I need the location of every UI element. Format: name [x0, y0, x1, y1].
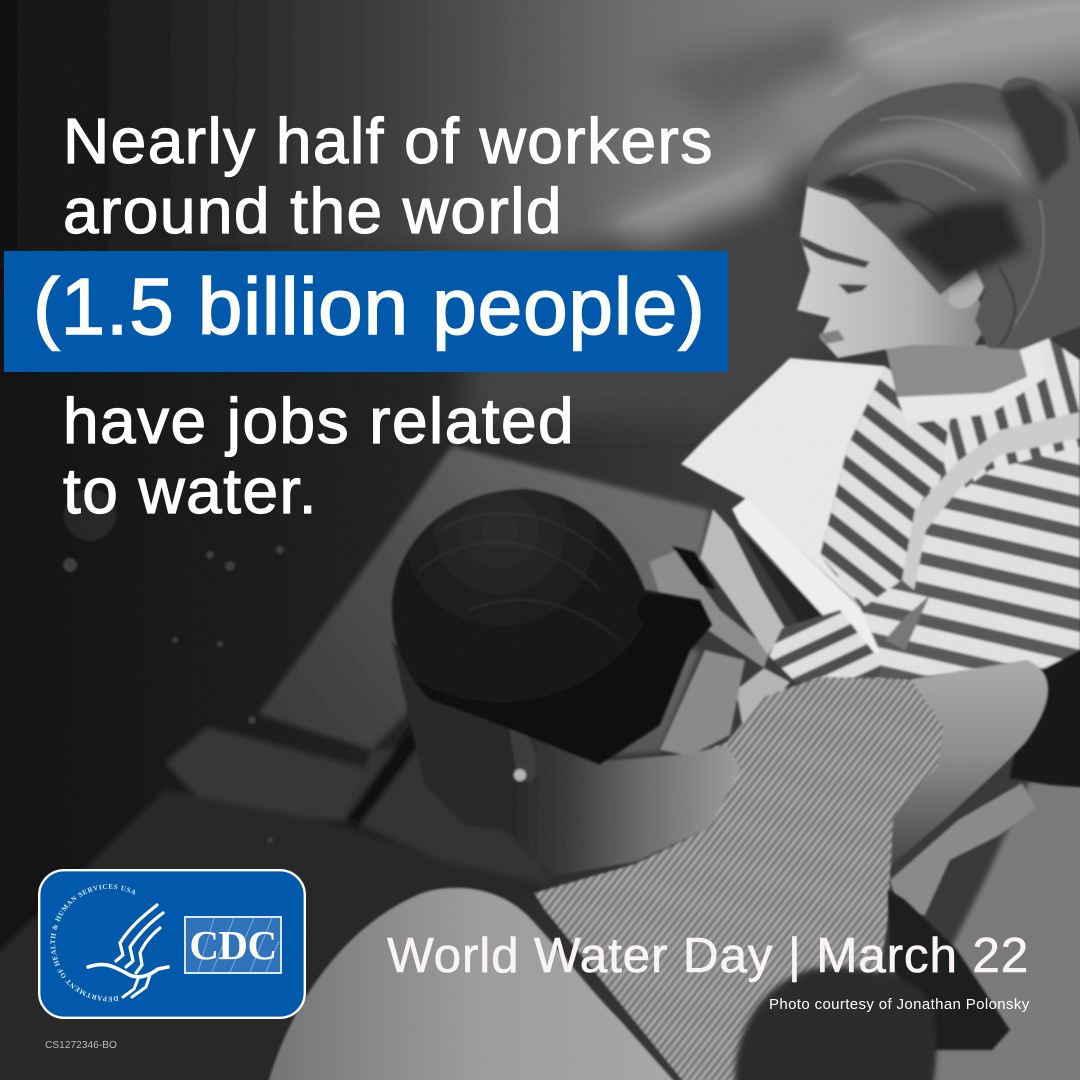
stone slab [0, 446, 710, 1080]
banner text: (1.5 billion people) [33, 262, 706, 351]
water surface at top [0, 0, 1080, 420]
arm [880, 660, 1048, 868]
heading: bottom lines: to water. [63, 455, 318, 527]
face [797, 170, 990, 358]
dark gap under notebook [740, 530, 860, 650]
heading: top lines [63, 105, 714, 247]
notebook pages [681, 358, 885, 606]
ear and earring [508, 720, 536, 782]
highlight banner [4, 251, 728, 372]
hands and arm [649, 550, 770, 668]
striped sleeve [769, 610, 880, 682]
heading: bottom lines [63, 385, 575, 527]
hair [807, 77, 1080, 350]
heading: top lines: Nearly half of workers [63, 105, 714, 177]
event title: World Water Day | March 22 [387, 928, 1029, 983]
CDC box: CDC [189, 922, 277, 968]
CDC and HHS logo [38, 869, 306, 1019]
HHS seal text [55, 889, 152, 997]
heading: bottom lines: have jobs related [63, 385, 575, 457]
light foreground cap [266, 888, 682, 1080]
HHS eagle [88, 905, 168, 997]
striped shirt [534, 677, 943, 1080]
hair [392, 489, 712, 765]
garbage bag [888, 889, 1010, 1050]
neck [885, 345, 1028, 398]
heading: top lines: around the world [63, 175, 563, 247]
standing woman [649, 77, 1080, 915]
shirt torso [820, 325, 1080, 680]
pavement bottom right [925, 780, 1080, 1080]
dark foreground figure [735, 966, 936, 1080]
photo credit: Photo courtesy of Jonathan Polonsky [769, 996, 1030, 1013]
rolled notebook [732, 498, 880, 660]
hair tie [637, 595, 667, 625]
jeans and leg [890, 783, 1036, 915]
backpack strap [902, 412, 1080, 590]
dark trousers [1010, 560, 1080, 790]
seated woman [392, 489, 1048, 1080]
ground speckles [63, 489, 284, 843]
thigh behind [736, 668, 790, 740]
collar [897, 323, 1047, 424]
CDC and HHS logo: DEPARTMENT OF HEALTH & HUMAN SERVICES USA [50, 884, 135, 1002]
job code: CS1272346-BO [45, 1040, 117, 1051]
face and back skin [392, 640, 741, 876]
